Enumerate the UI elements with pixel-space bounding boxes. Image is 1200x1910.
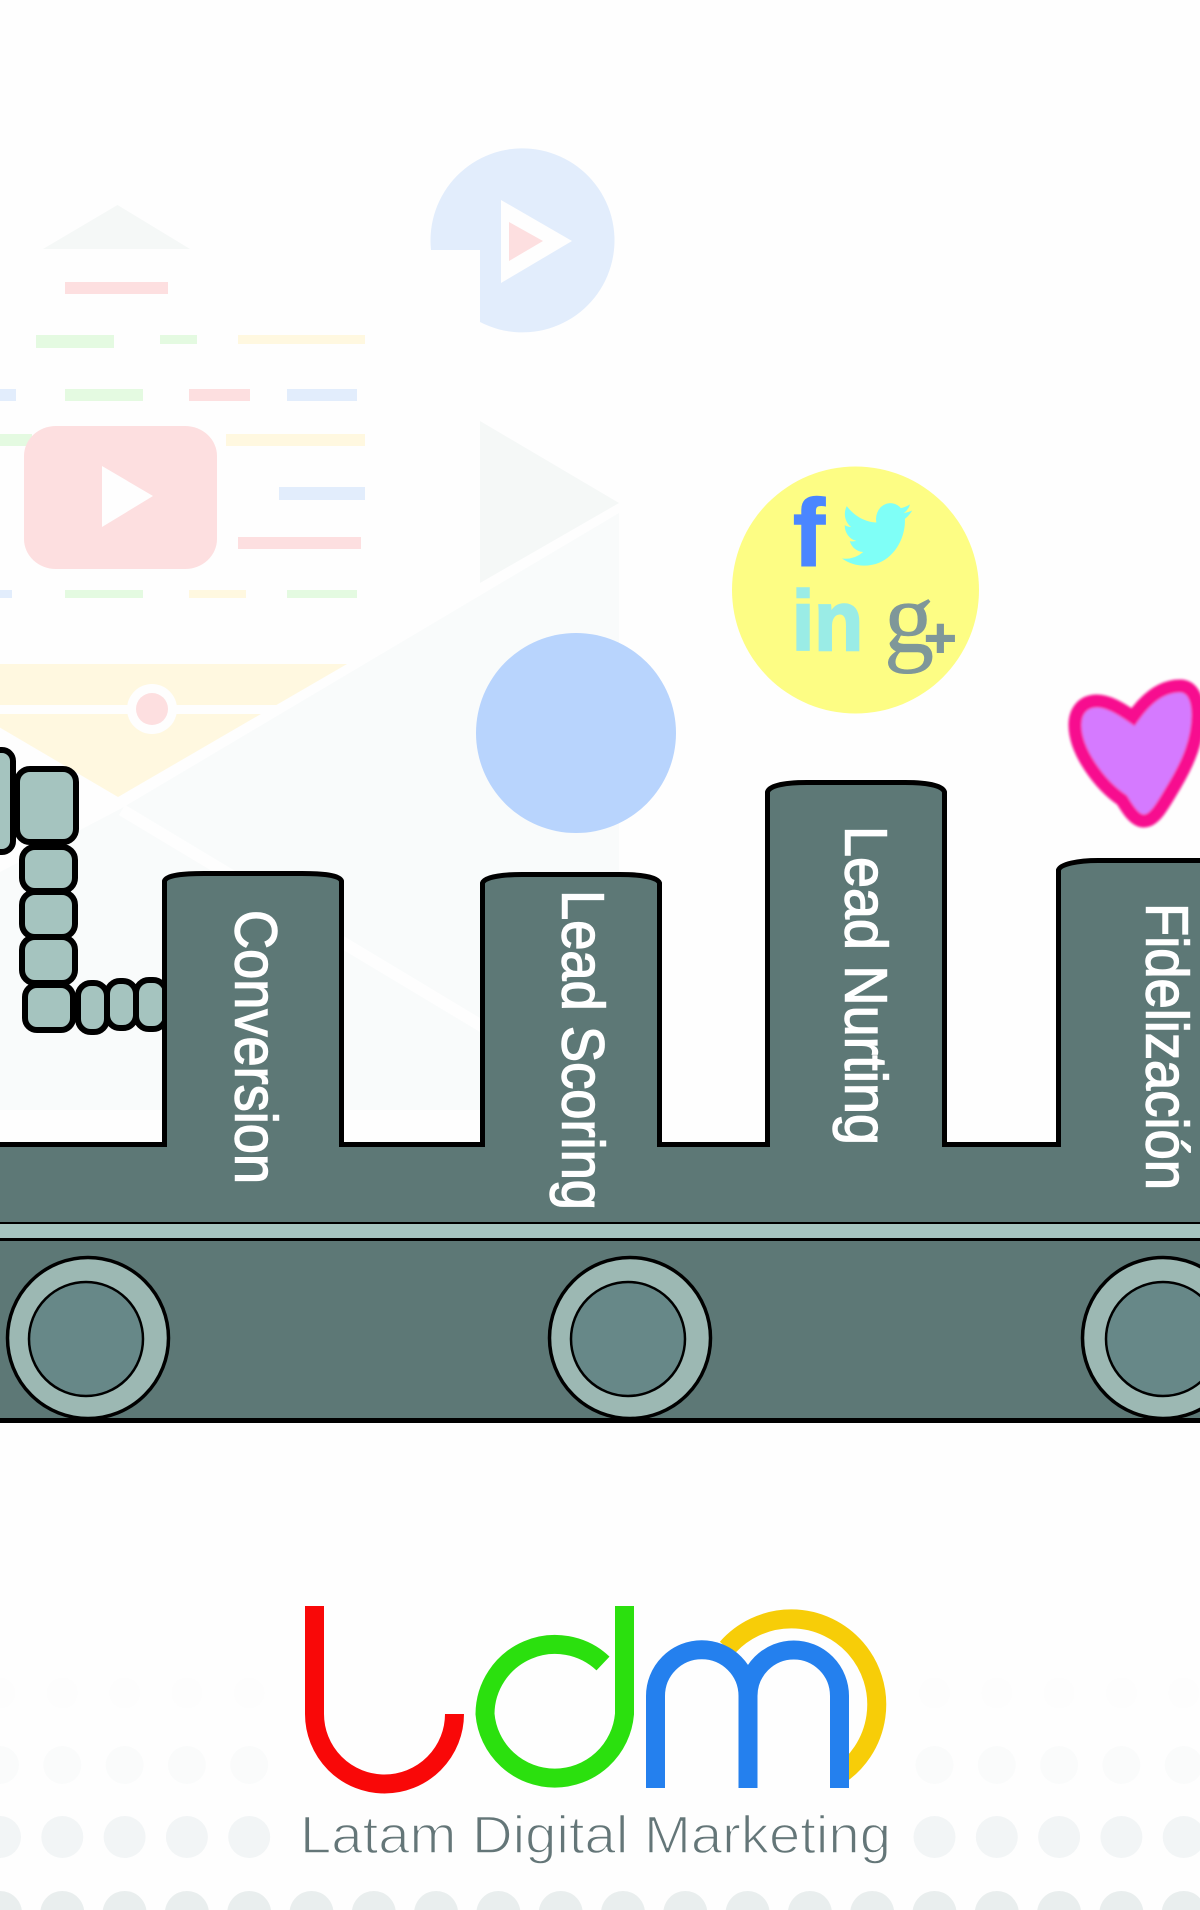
social circle background	[732, 466, 979, 714]
logo letter D	[485, 1606, 624, 1778]
label: Conversion: Conversion	[222, 910, 288, 1184]
conveyor machine	[0, 782, 1200, 1420]
icon: google plus: g	[884, 562, 934, 675]
label: Lead Scoring: Lead Scoring	[550, 890, 616, 1210]
icon: linkedin: in	[792, 574, 863, 668]
logo yellow ring	[727, 1619, 877, 1776]
faded icon: play bubble	[430, 148, 614, 332]
wheel 1	[8, 1258, 168, 1418]
wheel 3	[1082, 1258, 1200, 1418]
icon: facebook: f	[793, 480, 826, 587]
faded background: document with text lines	[0, 205, 365, 598]
wheel 2	[550, 1258, 710, 1418]
logo wordmark: Latam Digital Marketing	[300, 1806, 891, 1865]
logo letter M	[656, 1650, 840, 1788]
machine body with four columns	[0, 782, 1200, 1420]
logo: LDM	[314, 1606, 877, 1788]
icon: twitter bird	[842, 503, 912, 566]
icon: heart	[1075, 686, 1198, 821]
chain of links feeding Conversion	[0, 750, 166, 1032]
faded icon: grey play triangle	[480, 421, 619, 583]
faded icon: video player	[24, 426, 217, 569]
faded icon: envelope	[0, 513, 619, 1110]
faded background: dot pattern	[0, 1678, 1200, 1910]
blue circle above Lead Scoring	[476, 633, 676, 833]
label: Fidelización: Fidelización	[1134, 903, 1200, 1190]
icon: google plus: +	[924, 606, 957, 669]
label: Lead Nurting: Lead Nurting	[832, 826, 898, 1145]
social media circle	[732, 466, 979, 714]
logo letter L	[314, 1606, 454, 1784]
belt rail	[0, 1222, 1200, 1241]
